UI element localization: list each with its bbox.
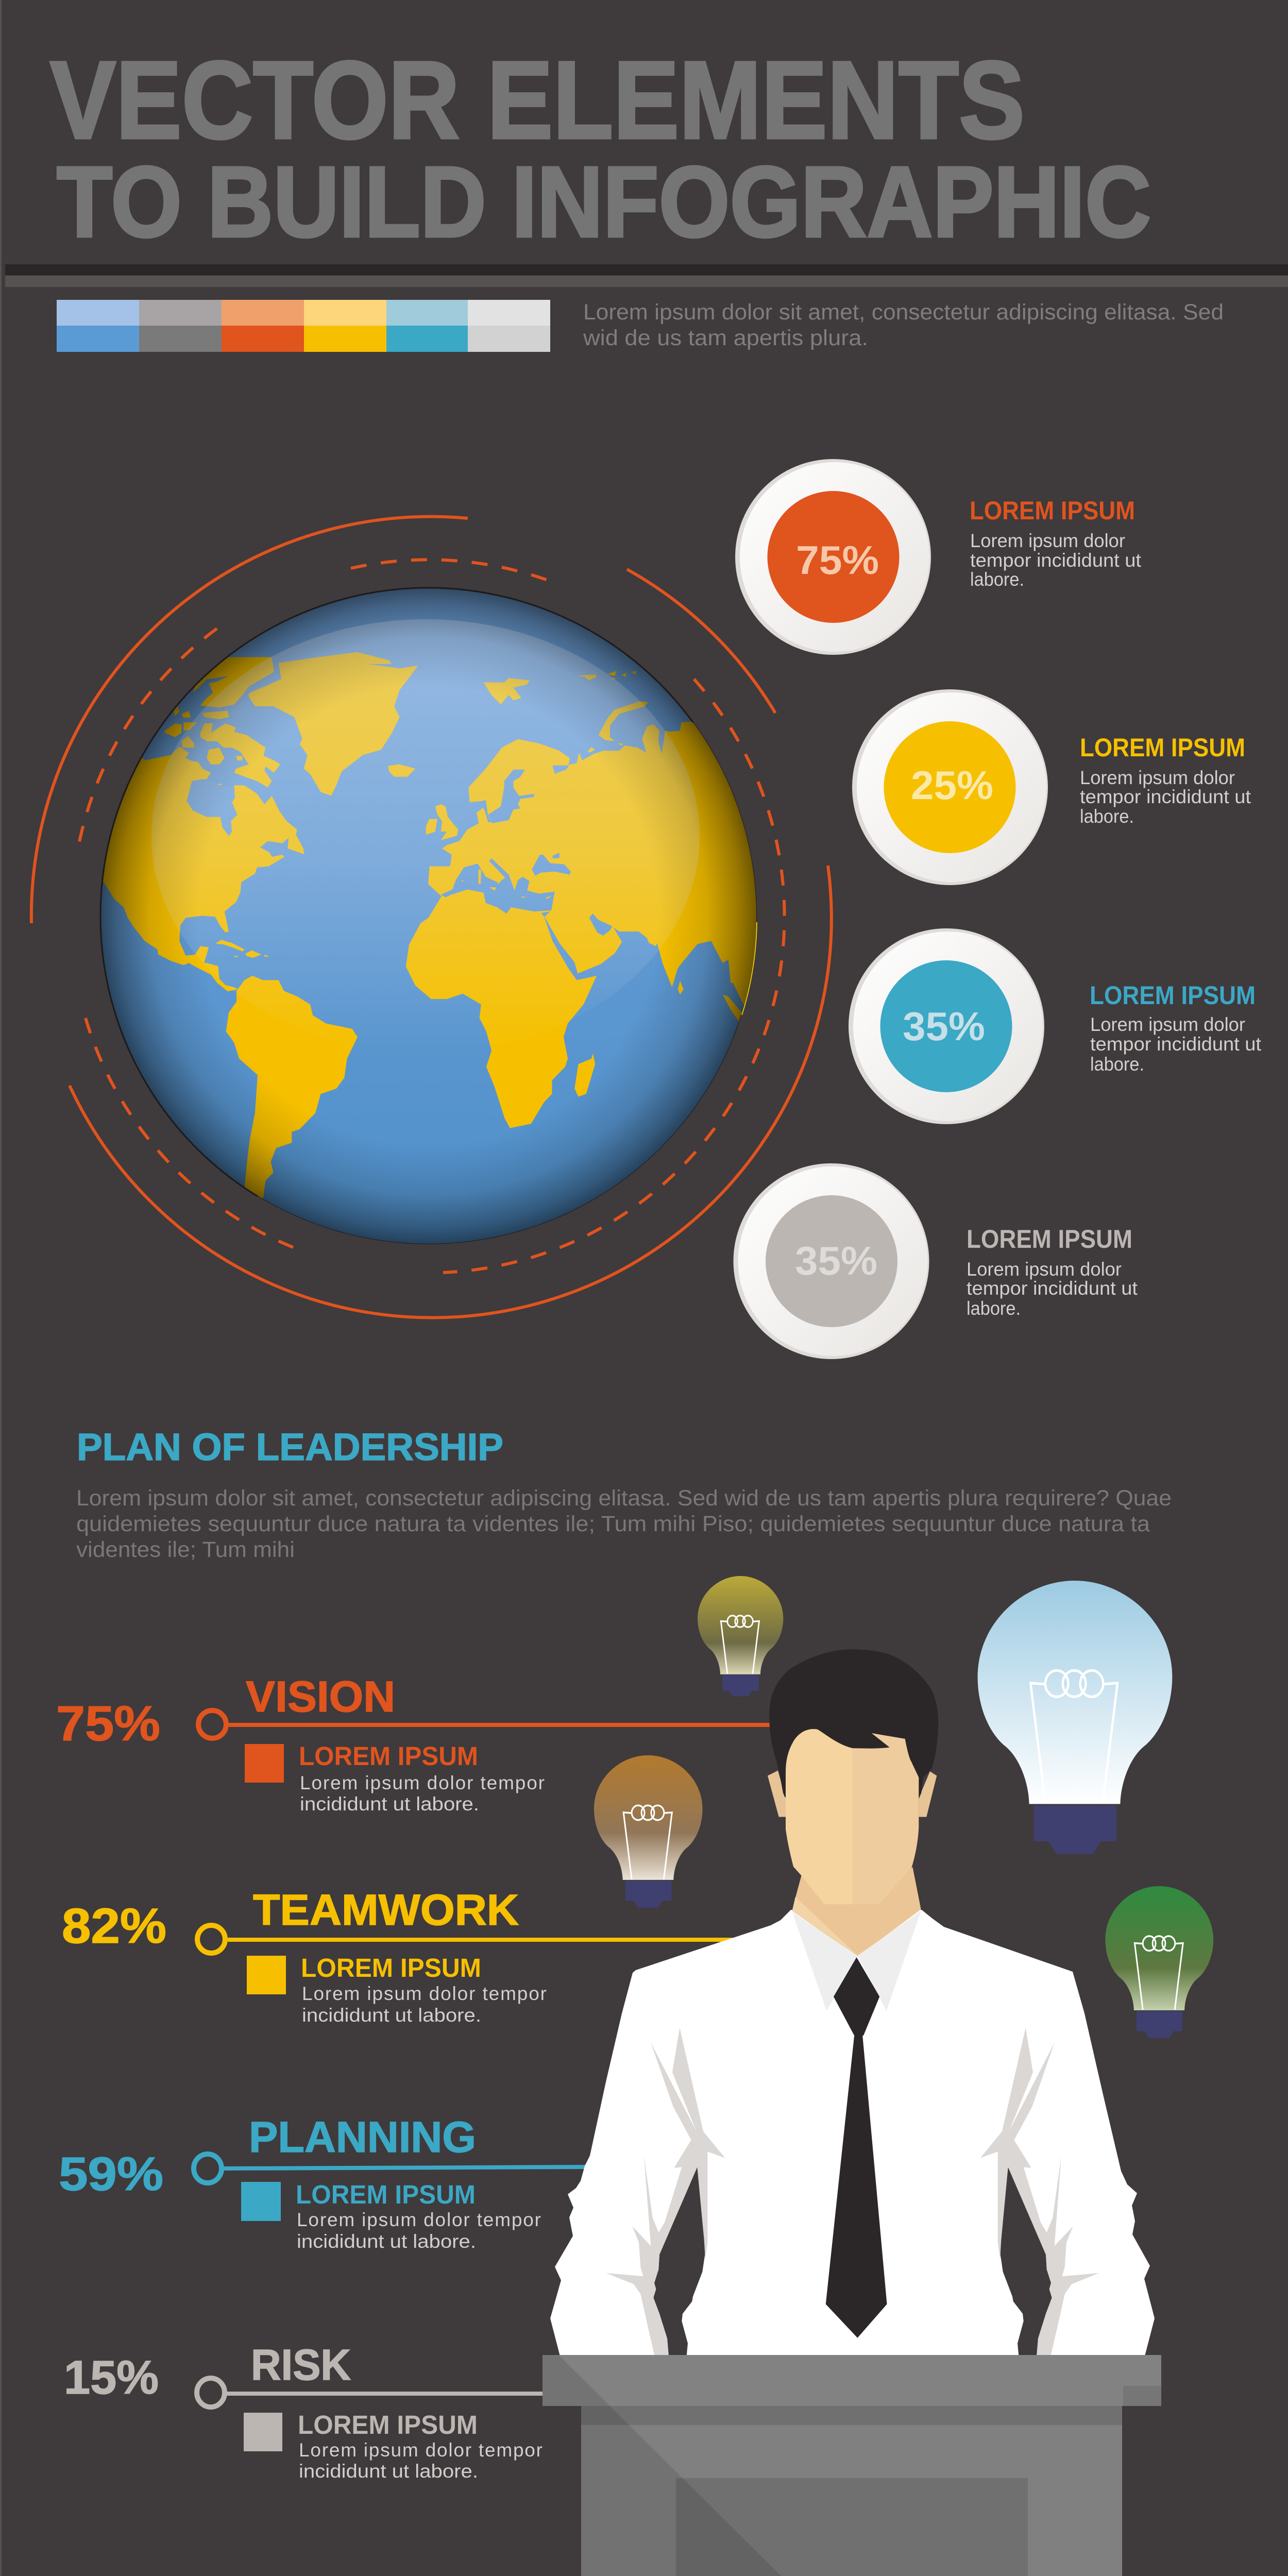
badge: 35% teal xyxy=(849,928,1044,1124)
label: 35% grey: LOREM IPSUM xyxy=(967,1225,1132,1253)
row: teamwork xyxy=(62,1886,733,2026)
row: planning: incididunt ut labore. xyxy=(297,2231,476,2252)
row: planning: PLANNING xyxy=(249,2113,476,2161)
row: planning xyxy=(59,2113,590,2252)
label: 25%: Lorem ipsum dolor xyxy=(1080,767,1235,788)
world globe xyxy=(93,588,803,1244)
icon: olive light bulb xyxy=(698,1576,783,1696)
label: 25%: LOREM IPSUM xyxy=(1080,733,1245,762)
row: teamwork: LOREM IPSUM xyxy=(301,1953,481,1982)
label: 35% teal xyxy=(1090,981,1262,1075)
label: 35% teal: tempor incididunt ut xyxy=(1090,1033,1262,1055)
section heading: PLAN OF LEADERSHIP xyxy=(77,1426,503,1468)
row: risk: Lorem ipsum dolor tempor xyxy=(299,2439,543,2461)
label: 75%: LOREM IPSUM xyxy=(970,496,1135,525)
label: 75%: tempor incididunt ut xyxy=(970,550,1142,571)
row: planning: 59% xyxy=(59,2148,163,2200)
intro text: Lorem ipsum dolor sit amet, consectetur adipiscing elitasa. Sed xyxy=(583,300,1224,325)
label: 75%: Lorem ipsum dolor xyxy=(970,530,1125,551)
label: 75%: labore. xyxy=(970,569,1024,590)
globe orbit arcs xyxy=(31,517,832,1318)
row: vision: incididunt ut labore. xyxy=(300,1793,479,1815)
row: risk: RISK xyxy=(251,2341,351,2389)
row: risk: incididunt ut labore. xyxy=(299,2461,478,2482)
inland seas xyxy=(441,770,612,936)
row: planning: LOREM IPSUM xyxy=(296,2180,476,2209)
icon: green light bulb xyxy=(1105,1886,1213,2038)
icon: orange light bulb xyxy=(594,1755,703,1908)
row: vision: 75% xyxy=(56,1696,160,1751)
badge: 35% teal: 35% xyxy=(903,1004,985,1049)
row: vision xyxy=(56,1672,772,1815)
label: 35% grey xyxy=(967,1225,1138,1319)
title: TO BUILD INFOGRAPHIC xyxy=(57,146,1151,258)
label: 35% teal: labore. xyxy=(1090,1054,1144,1075)
label: 35% grey: tempor incididunt ut xyxy=(967,1278,1138,1299)
label: 35% grey: Lorem ipsum dolor xyxy=(967,1259,1122,1280)
continents xyxy=(93,652,803,1201)
badge: 35% grey: 35% xyxy=(795,1238,877,1283)
podium shadow xyxy=(543,2355,835,2576)
badge: 75%: 75% xyxy=(796,537,879,583)
row: teamwork: Lorem ipsum dolor tempor xyxy=(302,1983,547,2004)
row: teamwork: 82% xyxy=(62,1899,166,1954)
row: vision: VISION xyxy=(246,1672,395,1721)
businessman figure xyxy=(550,1649,1155,2358)
podium top slab xyxy=(543,2355,1161,2406)
section paragraph: quidemietes sequuntur duce natura ta videntes ile; Tum mihi Piso; quidemietes sequuntur duce natura ta xyxy=(76,1512,1150,1536)
section paragraph: Lorem ipsum dolor sit amet, consectetur adipiscing elitasa. Sed wid de us tam apertis plura requirere? Quae xyxy=(76,1486,1172,1511)
row: risk: LOREM IPSUM xyxy=(298,2410,478,2439)
badge: 35% grey xyxy=(734,1163,929,1359)
intro text: wid de us tam apertis plura. xyxy=(583,326,868,350)
row: risk xyxy=(64,2341,543,2482)
globe highlight xyxy=(151,619,700,1053)
title: VECTOR ELEMENTS xyxy=(50,39,1025,162)
row: vision: Lorem ipsum dolor tempor xyxy=(300,1772,545,1793)
title xyxy=(50,39,1151,258)
neck, collar and tie xyxy=(792,1867,921,2338)
label: 25% xyxy=(1080,733,1251,827)
icon: large blue light bulb xyxy=(978,1581,1172,1854)
intro text xyxy=(583,300,1224,350)
label: 75% xyxy=(970,496,1142,590)
label: 25%: tempor incididunt ut xyxy=(1080,786,1251,807)
label: 35% teal: Lorem ipsum dolor xyxy=(1090,1014,1245,1035)
shirt folds right xyxy=(980,2028,1099,2358)
section paragraph xyxy=(76,1486,1172,1562)
globe rim shadow xyxy=(100,588,757,1244)
badge: 25%: 25% xyxy=(911,762,993,808)
left edge strip xyxy=(0,0,2,2576)
row: risk: 15% xyxy=(64,2351,159,2404)
shirt folds left xyxy=(606,2028,725,2358)
badge: 25% xyxy=(852,689,1048,885)
label: 35% grey: labore. xyxy=(967,1298,1021,1319)
colour palette swatches xyxy=(57,300,550,352)
label: 35% teal: LOREM IPSUM xyxy=(1090,981,1256,1010)
badge: 75% xyxy=(735,459,931,655)
head xyxy=(768,1649,938,1904)
podium xyxy=(455,2355,1242,2576)
row: teamwork: TEAMWORK xyxy=(253,1886,519,1934)
white shirt xyxy=(550,1910,1155,2358)
podium column xyxy=(581,2406,1122,2576)
section paragraph: videntes ile; Tum mihi xyxy=(76,1537,295,1562)
row: vision: LOREM IPSUM xyxy=(299,1741,478,1771)
label: 25%: labore. xyxy=(1080,806,1134,827)
row: planning: Lorem ipsum dolor tempor xyxy=(297,2209,541,2230)
globe outline xyxy=(100,588,757,1196)
row: teamwork: incididunt ut labore. xyxy=(302,2005,481,2026)
header divider xyxy=(5,264,1288,287)
